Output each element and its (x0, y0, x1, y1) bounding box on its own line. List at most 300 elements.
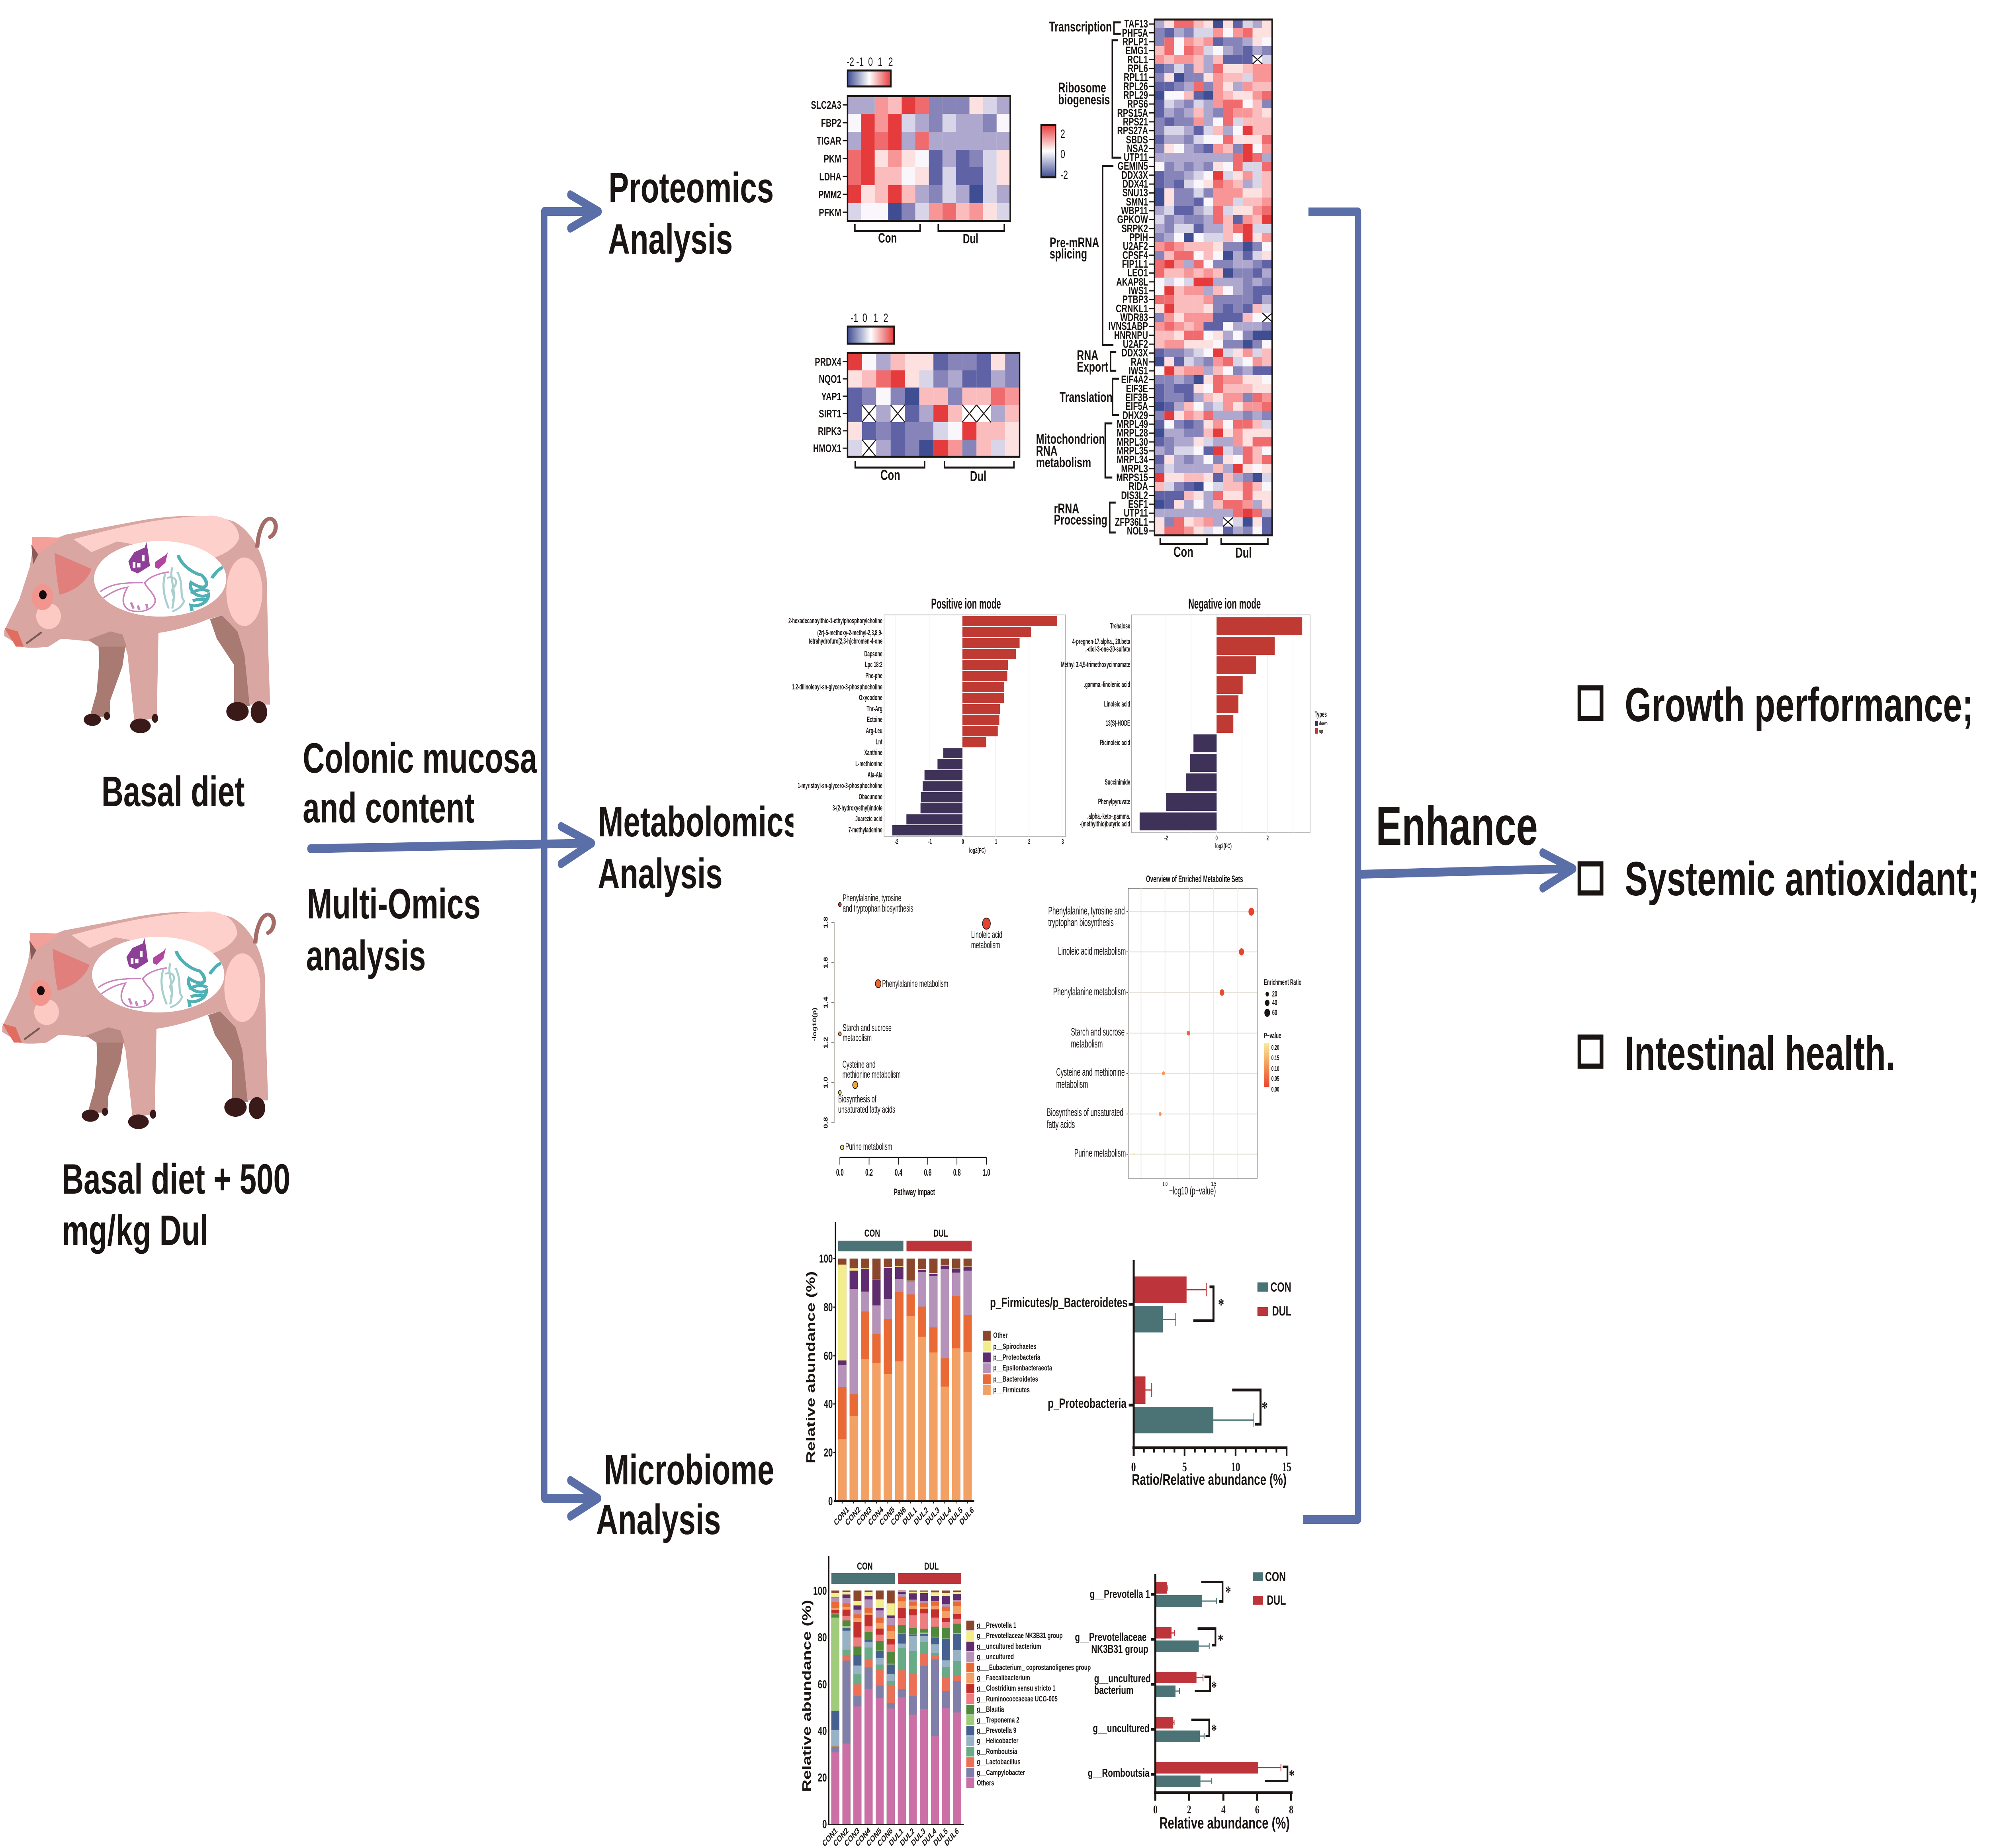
bar chart: genus abundance: 4 (1221, 1803, 1226, 1816)
stacked bar chart: genus composition: DUL6 (943, 1826, 960, 1848)
bar chart: phylum ratio and abundance: p_Proteobacteria (1048, 1396, 1127, 1411)
stacked bar chart: genus composition: Others (977, 1779, 994, 1787)
panel: large proteomics heatmap: FIP1L1 (1122, 258, 1148, 270)
stacked bar chart: genus composition: g__Faecalibacterium (977, 1674, 1030, 1682)
panel: large proteomics heatmap: 2 (1060, 127, 1065, 141)
stacked bar chart: phylum composition: DUL4 (936, 1505, 953, 1527)
stacked bar chart: phylum composition: DUL3 (924, 1505, 941, 1527)
panel: glycolysis heatmap: 0 (868, 55, 873, 69)
bar chart: positive ion mode: tetrahydrofuro[2,3-h]chromen-4-one (809, 637, 882, 646)
panel: large proteomics heatmap: Mitochondrion (1036, 432, 1105, 447)
bubble chart: pathway impact: and tryptophan biosynthesis (843, 903, 913, 914)
bar chart: genus abundance: Relative abundance (%) (1159, 1814, 1290, 1832)
heading: Proteomics Analysis: Analysis (608, 215, 733, 263)
bar chart: genus abundance: bacterium (1094, 1684, 1133, 1697)
bar chart: negative ion mode: .gamma.-linolenic acid (1084, 681, 1130, 689)
bar chart: negative ion mode: Linoleic acid (1104, 700, 1130, 709)
stacked bar chart: genus composition: DUL5 (932, 1826, 949, 1848)
bar chart: positive ion mode: Phe-phe (865, 672, 882, 680)
panel: large proteomics heatmap: IVNS1ABP (1108, 320, 1148, 333)
bubble chart: pathway impact (811, 893, 1002, 1198)
dot plot: enriched metabolite sets: −log10 (p−value) (1169, 1184, 1216, 1197)
panel: antioxidant heatmap: PRDX4 (815, 356, 841, 368)
bar chart: positive ion mode (788, 596, 1066, 855)
heading: Microbiome Analysis: Analysis (596, 1496, 721, 1543)
dot plot: enriched metabolite sets: 0.15 (1271, 1054, 1279, 1062)
panel: large proteomics heatmap: ESF1 (1128, 498, 1148, 511)
dot plot: enriched metabolite sets: Phenylalanine metabolism (1053, 985, 1126, 998)
panel: large proteomics heatmap (1036, 18, 1272, 561)
panel: large proteomics heatmap: RPL29 (1123, 89, 1148, 102)
heading: Proteomics Analysis: Proteomics (608, 164, 774, 211)
panel: large proteomics heatmap: Transcription (1049, 20, 1112, 35)
panel: large proteomics heatmap: Pre-mRNA (1050, 235, 1099, 251)
bar chart: negative ion mode: 13(S)-HODE (1106, 719, 1130, 728)
dot plot: enriched metabolite sets: Phenylalanine, tyrosine and (1048, 904, 1125, 917)
dot plot: enriched metabolite sets: Linoleic acid metabolism (1058, 945, 1126, 957)
stacked bar chart: phylum composition: p__Epsilonbacteraeota (993, 1364, 1052, 1372)
bar chart: positive ion mode: Oxycodone (859, 694, 882, 702)
bar chart: positive ion mode: (2r)-5-methoxy-2-methyl-2,3,8,9- (818, 629, 882, 637)
panel: glycolysis heatmap: PMM2 (818, 189, 841, 201)
stacked bar chart: phylum composition: 40 (823, 1398, 833, 1411)
panel: antioxidant heatmap: RIPK3 (818, 425, 841, 438)
bar chart: phylum ratio and abundance (990, 1260, 1291, 1488)
bubble chart: pathway impact: 0.0 (836, 1167, 844, 1178)
panel: antioxidant heatmap: 1 (873, 311, 878, 325)
heading: Metabolomics Analysis: Metabolomics (598, 798, 800, 846)
panel: large proteomics heatmap: Ribosome (1058, 80, 1106, 96)
panel: large proteomics heatmap: RNA (1077, 348, 1098, 363)
icon: pig basal diet plus Dul (2, 911, 274, 1129)
heading: Proteomics Analysis (608, 164, 774, 263)
bar chart: phylum ratio and abundance: 10 (1231, 1460, 1240, 1474)
panel: large proteomics heatmap: biogenesis (1058, 92, 1110, 108)
panel: large proteomics heatmap: MRPL28 (1117, 427, 1148, 439)
panel: large proteomics heatmap: MRPL3 (1121, 463, 1148, 475)
bar chart: positive ion mode: -1 (928, 838, 932, 846)
list: outcomes (1579, 678, 1979, 1080)
panel: large proteomics heatmap: WDR83 (1120, 311, 1148, 324)
text: Multi-Omics analysis: analysis (306, 932, 426, 979)
dot plot: enriched metabolite sets: 0.05 (1271, 1075, 1279, 1083)
panel: glycolysis heatmap: Dul (963, 231, 978, 247)
panel: large proteomics heatmap: DDX41 (1123, 178, 1148, 190)
bar chart: negative ion mode: Types (1315, 711, 1327, 719)
bar chart: genus abundance (1075, 1570, 1295, 1832)
bar chart: negative ion mode: .alpha.-keto-.gamma. (1087, 812, 1130, 821)
list: outcomes: Intestinal health. (1625, 1027, 1895, 1080)
panel: large proteomics heatmap: metabolism (1036, 455, 1091, 470)
stacked bar chart: genus composition: DUL4 (921, 1826, 938, 1848)
panel: antioxidant heatmap (813, 311, 1020, 484)
bar chart: phylum ratio and abundance: * (1261, 1398, 1268, 1417)
panel: large proteomics heatmap: EIF4A2 (1121, 374, 1148, 386)
stacked bar chart: genus composition: g__Clostridium sensu stricto 1 (977, 1684, 1056, 1693)
stacked bar chart: phylum composition (804, 1222, 1052, 1528)
bar chart: genus abundance: 6 (1255, 1803, 1259, 1816)
bar chart: genus abundance: g__uncultured (1093, 1722, 1150, 1735)
panel: glycolysis heatmap: TIGAR (817, 135, 841, 147)
panel: antioxidant heatmap: 2 (884, 311, 888, 325)
bar chart: phylum ratio and abundance: 15 (1282, 1460, 1291, 1474)
bubble chart: pathway impact: Pathway Impact (894, 1187, 935, 1198)
dot plot: enriched metabolite sets: tryptophan biosynthesis (1048, 916, 1114, 928)
stacked bar chart: phylum composition: 20 (823, 1447, 833, 1459)
dot plot: enriched metabolite sets: fatty acids (1047, 1118, 1075, 1130)
panel: glycolysis heatmap: 1 (878, 55, 882, 69)
dot plot: enriched metabolite sets: Enrichment Ratio (1264, 978, 1301, 987)
bubble chart: pathway impact: 0.8 (822, 1117, 829, 1129)
bubble chart: pathway impact: metabolism (843, 1033, 872, 1043)
bubble chart: pathway impact: 1.0 (822, 1077, 829, 1088)
bar chart: genus abundance: 8 (1289, 1803, 1293, 1816)
panel: large proteomics heatmap: SMN1 (1126, 196, 1148, 208)
panel: glycolysis heatmap: -2 (847, 55, 854, 69)
bar chart: negative ion mode: Phenylpyruvate (1098, 798, 1130, 806)
dot plot: enriched metabolite sets: P−value (1264, 1032, 1281, 1040)
stacked bar chart: phylum composition: 60 (823, 1350, 833, 1363)
stacked bar chart: phylum composition: CON (864, 1227, 880, 1239)
panel: large proteomics heatmap: rRNA (1054, 501, 1079, 517)
dot plot: enriched metabolite sets (1047, 874, 1301, 1197)
stacked bar chart: phylum composition: 0 (828, 1495, 833, 1508)
stacked bar chart: genus composition: g__Prevotella 1 (977, 1621, 1016, 1630)
bar chart: negative ion mode: Ricinoleic acid (1100, 739, 1130, 747)
dot plot: enriched metabolite sets: Starch and sucrose (1071, 1026, 1125, 1038)
bubble chart: pathway impact: 0.6 (924, 1167, 931, 1178)
panel: large proteomics heatmap: LEO1 (1127, 267, 1148, 279)
panel: large proteomics heatmap: EIF3B (1125, 392, 1148, 404)
bar chart: genus abundance: CON (1265, 1570, 1286, 1584)
stacked bar chart: genus composition: g__uncultured bacterium (977, 1642, 1041, 1651)
panel: large proteomics heatmap: DDX3X (1122, 347, 1148, 359)
bubble chart: pathway impact: Biosynthesis of (838, 1094, 876, 1105)
stacked bar chart: genus composition: 100 (813, 1585, 827, 1597)
panel: antioxidant heatmap: Con (880, 467, 900, 483)
panel: large proteomics heatmap: U2AF2 (1123, 240, 1148, 253)
panel: large proteomics heatmap: RPL26 (1123, 80, 1148, 93)
panel: large proteomics heatmap: PTBP3 (1123, 294, 1148, 306)
panel: large proteomics heatmap: GEMIN5 (1118, 160, 1148, 172)
bar chart: negative ion mode: 0 (1215, 834, 1218, 842)
panel: large proteomics heatmap: Translation (1060, 390, 1113, 405)
bar chart: positive ion mode: Juarezic acid (855, 815, 882, 823)
bar chart: genus abundance: * (1225, 1583, 1231, 1601)
bar chart: genus abundance: NK3B31 group (1091, 1643, 1148, 1656)
panel: large proteomics heatmap: MRPL49 (1117, 418, 1148, 431)
panel: antioxidant heatmap: -1 (851, 311, 858, 325)
panel: glycolysis heatmap: PFKM (819, 207, 841, 219)
heading: Microbiome Analysis: Microbiome (604, 1446, 774, 1494)
bubble chart: pathway impact: Starch and sucrose (843, 1023, 892, 1034)
panel: glycolysis heatmap: Con (878, 231, 897, 246)
stacked bar chart: genus composition: g__Treponema 2 (977, 1716, 1019, 1725)
panel: large proteomics heatmap: RPS6 (1127, 98, 1148, 110)
bar chart: negative ion mode: .-diol-3-one-20-sulfate (1085, 645, 1130, 654)
dot plot: enriched metabolite sets: Overview of Enriched Metabolite Sets (1146, 874, 1243, 885)
dot plot: enriched metabolite sets: 1.0 (1162, 1180, 1168, 1188)
bar chart: negative ion mode: Succinimide (1105, 778, 1130, 787)
dot plot: enriched metabolite sets: 0.10 (1271, 1065, 1279, 1073)
stacked bar chart: genus composition: DUL1 (888, 1826, 905, 1848)
panel: large proteomics heatmap: MRPL30 (1117, 436, 1148, 448)
stacked bar chart: genus composition: g__Prevotellaceae NK3B31 group (977, 1632, 1063, 1640)
panel: large proteomics heatmap: SNU13 (1123, 187, 1148, 199)
panel: glycolysis heatmap: LDHA (819, 171, 841, 183)
bubble chart: pathway impact: 1.4 (822, 996, 829, 1008)
panel: large proteomics heatmap: RPLP1 (1123, 36, 1148, 48)
bubble chart: pathway impact: -log10(p) (811, 1008, 818, 1041)
bar chart: phylum ratio and abundance: p_Firmicutes/p_Bacteroidetes (990, 1295, 1128, 1310)
bar chart: genus abundance: * (1211, 1721, 1217, 1739)
bar chart: positive ion mode: Positive ion mode (931, 596, 1001, 612)
bar chart: negative ion mode: 4-pregnen-17.alpha., 20.beta (1072, 638, 1130, 646)
stacked bar chart: phylum composition: CON3 (855, 1505, 873, 1528)
stacked bar chart: phylum composition: 80 (823, 1301, 833, 1314)
bar chart: positive ion mode: Arg-Leu (866, 727, 882, 735)
bar chart: positive ion mode: L-methionine (855, 760, 882, 768)
bar chart: positive ion mode: 3-(2-hydroxyethyl)indole (832, 804, 882, 812)
bar chart: positive ion mode: 1,2-dilinoleoyl-sn-glycero-3-phosphocholine (792, 683, 882, 691)
panel: glycolysis heatmap: PKM (823, 153, 841, 165)
panel: large proteomics heatmap: EIF3E (1126, 383, 1148, 395)
panel: large proteomics heatmap: IWS1 (1128, 285, 1148, 297)
bar chart: positive ion mode: log2(FC) (969, 847, 986, 855)
text: Colonic mucosa and content: and content (303, 784, 475, 832)
bar chart: negative ion mode: up (1319, 728, 1323, 734)
panel: antioxidant heatmap: SIRT1 (819, 408, 841, 420)
bar chart: phylum ratio and abundance: 0 (1131, 1460, 1136, 1474)
bar chart: positive ion mode: Lnt (876, 738, 882, 746)
label: Basal diet + 500 mg/kg Dul: mg/kg Dul (62, 1206, 208, 1254)
arrow: enhance bracket and arrow (1303, 212, 1573, 1519)
panel: large proteomics heatmap: U2AF2 (1123, 338, 1148, 350)
bar chart: negative ion mode: -2 (1164, 834, 1168, 842)
stacked bar chart: phylum composition: CON5 (878, 1505, 896, 1528)
panel: antioxidant heatmap: YAP1 (821, 391, 841, 403)
bubble chart: pathway impact: Phenylalanine metabolism (882, 979, 948, 989)
panel: large proteomics heatmap: CRNKL1 (1116, 303, 1148, 315)
panel: large proteomics heatmap: RNA (1036, 444, 1058, 459)
bar chart: genus abundance: g__Romboutsia (1088, 1767, 1150, 1779)
bar chart: genus abundance: DUL (1267, 1593, 1286, 1608)
bar chart: genus abundance: 2 (1187, 1803, 1191, 1816)
bar chart: negative ion mode (1061, 596, 1328, 850)
panel: large proteomics heatmap: splicing (1050, 247, 1087, 262)
stacked bar chart: genus composition: DUL2 (899, 1826, 916, 1848)
text: Enhance: Enhance (1376, 796, 1538, 857)
panel: large proteomics heatmap: DIS3L2 (1121, 489, 1148, 502)
panel: large proteomics heatmap: MRPL35 (1117, 445, 1148, 457)
heading: Microbiome Analysis (596, 1446, 774, 1543)
arrow: branching arrows to omics (310, 195, 598, 1516)
panel: large proteomics heatmap: Con (1173, 544, 1193, 560)
list: outcomes: Growth performance; (1625, 678, 1973, 732)
bar chart: phylum ratio and abundance: 5 (1182, 1460, 1187, 1474)
panel: large proteomics heatmap: PPIH (1129, 231, 1148, 244)
stacked bar chart: phylum composition: CON2 (844, 1505, 862, 1528)
bar chart: negative ion mode: Trehalose (1110, 622, 1130, 630)
panel: large proteomics heatmap: DHX29 (1123, 409, 1148, 422)
panel: large proteomics heatmap: CPSF4 (1123, 249, 1148, 262)
panel: large proteomics heatmap: AKAP8L (1116, 276, 1148, 288)
panel: large proteomics heatmap: MRPS15 (1116, 472, 1148, 484)
stacked bar chart: phylum composition: DUL5 (947, 1505, 964, 1527)
bar chart: positive ion mode: Ectoine (867, 716, 882, 724)
panel: large proteomics heatmap: EIF5A (1125, 400, 1148, 413)
stacked bar chart: genus composition (800, 1556, 1091, 1848)
stacked bar chart: phylum composition: p__Proteobacteria (993, 1353, 1040, 1362)
panel: large proteomics heatmap: DDX3X (1122, 169, 1148, 182)
stacked bar chart: genus composition: g__Blautia (977, 1705, 1004, 1714)
bar chart: negative ion mode: 2 (1267, 834, 1269, 842)
heading: Metabolomics Analysis (598, 805, 793, 897)
stacked bar chart: phylum composition: Other (993, 1331, 1008, 1340)
dot plot: enriched metabolite sets: metabolism (1056, 1078, 1088, 1090)
bar chart: positive ion mode: 0 (962, 838, 964, 846)
dot plot: enriched metabolite sets: Cysteine and methionine (1056, 1066, 1125, 1078)
panel: large proteomics heatmap: WBP11 (1121, 205, 1148, 217)
icon: pig basal diet (4, 515, 276, 733)
stacked bar chart: genus composition: 80 (818, 1631, 827, 1644)
bar chart: positive ion mode: -2 (895, 838, 898, 846)
bar chart: positive ion mode: 2 (1028, 838, 1031, 846)
stacked bar chart: phylum composition: CON6 (890, 1505, 907, 1528)
bar chart: positive ion mode: Ala-Ala (868, 771, 882, 779)
bar chart: positive ion mode: 1-myristoyl-sn-glycero-3-phosphocholine (798, 782, 882, 790)
panel: large proteomics heatmap: RCL1 (1127, 54, 1148, 66)
heading: Metabolomics Analysis: Analysis (598, 850, 723, 897)
panel: large proteomics heatmap: Processing (1054, 513, 1107, 528)
panel: glycolysis heatmap: 2 (888, 55, 893, 69)
stacked bar chart: genus composition: Relative abundance (%) (800, 1600, 813, 1792)
stacked bar chart: phylum composition: DUL (933, 1227, 948, 1239)
bar chart: genus abundance: g__uncultured (1094, 1672, 1151, 1685)
text: Colonic mucosa and content: Colonic mucosa (303, 734, 538, 782)
bubble chart: pathway impact: 0.8 (953, 1167, 961, 1178)
bubble chart: pathway impact: Phenylalanine, tyrosine (843, 893, 901, 904)
panel: antioxidant heatmap: HMOX1 (813, 442, 841, 455)
panel: large proteomics heatmap: Export (1077, 360, 1108, 375)
text: Multi-Omics analysis (306, 880, 481, 979)
panel: large proteomics heatmap: RAN (1131, 356, 1148, 368)
panel: antioxidant heatmap: Dul (970, 468, 986, 484)
bar chart: positive ion mode: 2-hexadecanoylthio-1-ethylphosphorylcholine (788, 617, 882, 625)
stacked bar chart: phylum composition: 100 (819, 1253, 833, 1265)
bubble chart: pathway impact: methionine metabolism (843, 1069, 901, 1080)
panel: large proteomics heatmap: RPL11 (1124, 71, 1148, 84)
stacked bar chart: phylum composition: p__Bacteroidetes (993, 1375, 1038, 1384)
panel: glycolysis heatmap: FBP2 (821, 117, 841, 129)
bubble chart: pathway impact: 1.8 (822, 916, 829, 928)
stacked bar chart: genus composition: g__Campylobacter (977, 1769, 1025, 1777)
bar chart: phylum ratio and abundance: DUL (1272, 1304, 1291, 1319)
stacked bar chart: genus composition: 40 (818, 1725, 827, 1738)
bubble chart: pathway impact: 1.0 (983, 1167, 990, 1178)
bar chart: positive ion mode: Xanthine (864, 749, 882, 757)
bar chart: negative ion mode: -(methylthio)butyric acid (1080, 820, 1130, 828)
stacked bar chart: genus composition: 0 (822, 1818, 827, 1831)
dot plot: enriched metabolite sets: 20 (1272, 990, 1277, 998)
panel: large proteomics heatmap: 0 (1060, 147, 1065, 161)
stacked bar chart: phylum composition: DUL1 (902, 1505, 918, 1527)
bubble chart: pathway impact: 0.2 (865, 1167, 873, 1178)
panel: large proteomics heatmap: UTP11 (1124, 151, 1148, 164)
panel: large proteomics heatmap: RPS27A (1117, 125, 1148, 137)
dot plot: enriched metabolite sets: metabolism (1071, 1038, 1103, 1050)
panel: antioxidant heatmap: 0 (863, 311, 867, 325)
bar chart: genus abundance: * (1289, 1766, 1295, 1784)
list: outcomes: Systemic antioxidant; (1625, 852, 1979, 906)
dot plot: enriched metabolite sets: 0.20 (1271, 1044, 1279, 1052)
bubble chart: pathway impact: unsaturated fatty acids (838, 1104, 895, 1115)
bar chart: negative ion mode: Methyl 3,4,5-trimethoxycinnamate (1061, 661, 1130, 669)
stacked bar chart: phylum composition: CON4 (867, 1505, 885, 1528)
bar chart: genus abundance: 0 (1153, 1803, 1158, 1816)
bar chart: genus abundance: * (1218, 1631, 1223, 1649)
panel: large proteomics heatmap: SBDS (1126, 134, 1148, 146)
panel: glycolysis heatmap (811, 55, 1010, 247)
label: Basal diet: Basal diet (102, 767, 245, 815)
stacked bar chart: genus composition: g__Helicobacter (977, 1737, 1019, 1745)
bar chart: positive ion mode: 1 (995, 838, 997, 846)
bar chart: positive ion mode: Thr-Arg (866, 705, 882, 713)
label: Basal diet + 500 mg/kg Dul (62, 1155, 290, 1254)
stacked bar chart: genus composition: CON (857, 1560, 873, 1572)
bubble chart: pathway impact: Cysteine and (843, 1059, 876, 1070)
panel: large proteomics heatmap: PHF5A (1122, 27, 1148, 39)
dot plot: enriched metabolite sets: 40 (1272, 998, 1277, 1007)
dot plot: enriched metabolite sets: Purine metabolism (1074, 1147, 1126, 1159)
stacked bar chart: genus composition: DUL (924, 1560, 939, 1572)
stacked bar chart: phylum composition: p__Firmicutes (993, 1386, 1030, 1394)
bubble chart: pathway impact: 1.6 (822, 957, 829, 969)
panel: large proteomics heatmap: NOL9 (1127, 525, 1148, 537)
bar chart: positive ion mode: Lpc 18:2 (865, 661, 882, 669)
bar chart: negative ion mode: log2(FC) (1215, 842, 1232, 850)
stacked bar chart: genus composition: g__Prevotella 9 (977, 1727, 1016, 1735)
panel: large proteomics heatmap: NSA2 (1127, 143, 1148, 155)
panel: glycolysis heatmap: -1 (856, 55, 864, 69)
panel: large proteomics heatmap: UTP11 (1124, 507, 1148, 519)
stacked bar chart: phylum composition: DUL6 (958, 1505, 975, 1527)
stacked bar chart: genus composition: g___Eubacterium_ coprostanoligenes group (977, 1664, 1091, 1672)
stacked bar chart: genus composition: g__Lactobacillus (977, 1758, 1021, 1766)
bar chart: phylum ratio and abundance: * (1218, 1295, 1224, 1314)
panel: large proteomics heatmap: SRPK2 (1122, 223, 1148, 235)
panel: large proteomics heatmap: -2 (1060, 168, 1068, 182)
bar chart: genus abundance: g__Prevotella 1 (1090, 1588, 1150, 1601)
bubble chart: pathway impact: metabolism (971, 940, 1000, 951)
panel: large proteomics heatmap: MRPL34 (1117, 454, 1148, 466)
panel: large proteomics heatmap: HNRNPU (1114, 329, 1148, 342)
text: Colonic mucosa and content (303, 734, 538, 832)
stacked bar chart: genus composition: g__Ruminococcaceae UCG-005 (977, 1695, 1058, 1703)
stacked bar chart: genus composition: 60 (818, 1678, 827, 1691)
panel: large proteomics heatmap: RIDA (1128, 480, 1148, 493)
panel: large proteomics heatmap: RPS21 (1123, 116, 1148, 128)
panel: large proteomics heatmap: EMG1 (1125, 45, 1148, 57)
bar chart: genus abundance: g__Prevotellaceae (1075, 1631, 1146, 1644)
dot plot: enriched metabolite sets: 1.5 (1211, 1180, 1216, 1188)
dot plot: enriched metabolite sets: Biosynthesis of unsaturated (1047, 1106, 1123, 1118)
bubble chart: pathway impact: Linoleic acid (971, 930, 1002, 940)
bar chart: phylum ratio and abundance: Ratio/Relative abundance (%) (1132, 1471, 1287, 1488)
bar chart: positive ion mode: 7-methyladenine (849, 826, 882, 834)
bar chart: negative ion mode: down (1319, 721, 1328, 727)
panel: glycolysis heatmap: SLC2A3 (811, 99, 841, 112)
